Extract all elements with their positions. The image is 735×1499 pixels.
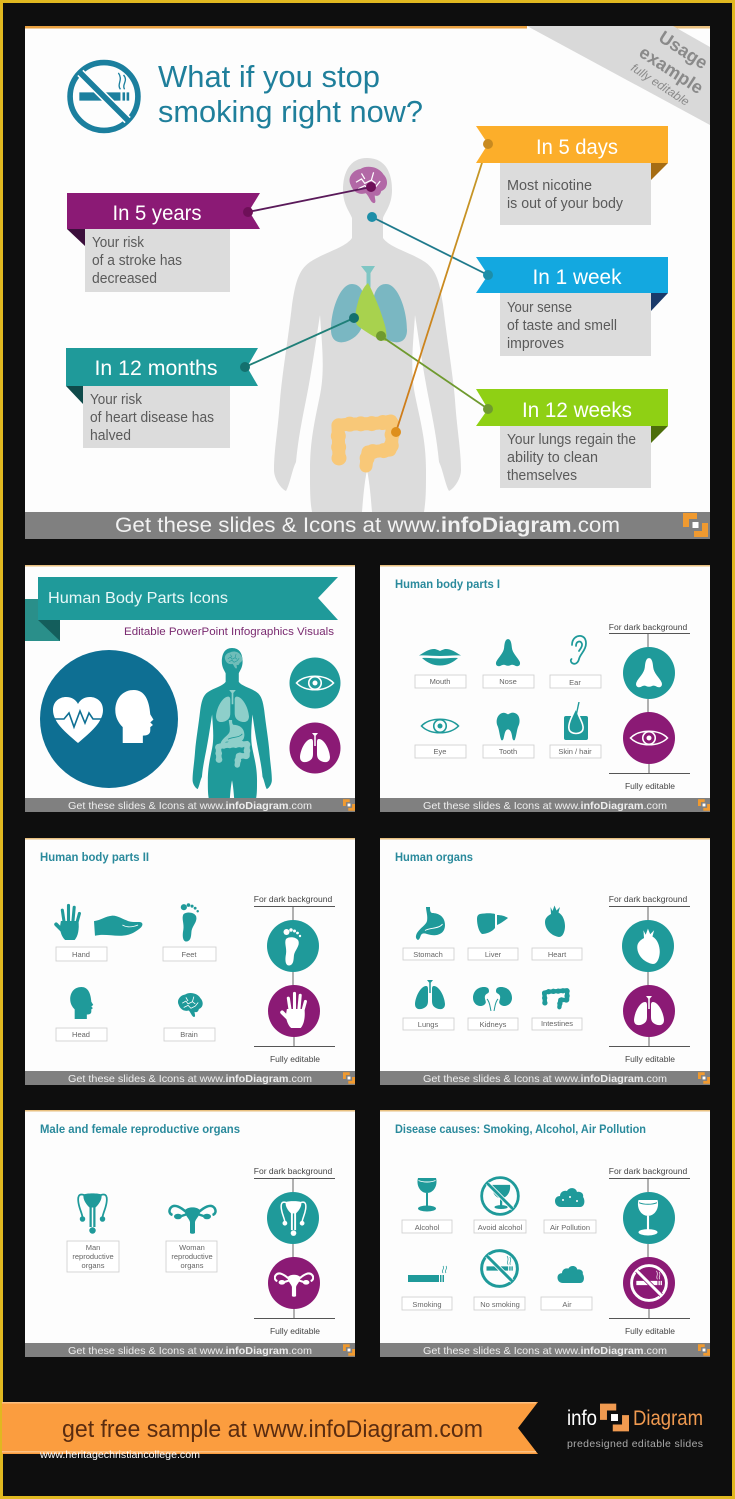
callout: in 1 week: of taste and smell [507,318,617,334]
icon group: avoid alcohol [474,1178,526,1233]
callout: in 12 months: Your risk [90,392,143,408]
body silhouette with organs [274,158,461,512]
callout: in 5 years [67,193,260,292]
icon group: alcohol [402,1178,452,1233]
corner tape: usage example [527,26,711,125]
icon group: male organs: organs [82,1261,105,1270]
title ribbon: Human Body Parts Icons [48,590,228,607]
icon row: mouth [415,649,466,688]
footer bar: Get these slides & Icons at www. infoDiagram.com [68,1073,312,1085]
icon row: skin and hair: Skin / hair [558,747,592,756]
callout: in 5 years: Your risk [92,235,145,251]
icon group: brain [164,993,215,1041]
icon group: intestines: Intestines [541,1019,573,1028]
callout: in 5 days: Most nicotine [507,178,592,194]
icon group: avoid alcohol: Avoid alcohol [478,1223,523,1232]
icon group: female organs [166,1206,217,1272]
icon row: tooth [483,713,534,758]
dark background column: Fully editable [270,1326,320,1336]
icon group: alcohol: Alcohol [415,1223,440,1232]
icon group: hand [56,905,142,961]
heading: Human body parts I [395,579,500,591]
callout: in 12 months: In 12 months [94,357,218,380]
panel: human body parts II [25,838,355,1085]
circle: eye [290,658,340,708]
footer bar: Get these slides & Icons at www. infoDiagram .com [115,514,620,537]
dark background column [609,1166,690,1336]
callout: in 12 months [66,348,258,448]
icon: pulse [53,711,103,727]
dark background column: For dark background [254,894,332,904]
callout: in 12 weeks: themselves [507,468,577,484]
icon group: intestines [532,990,582,1030]
icon: heart [53,697,103,743]
icon group: air [541,1266,592,1310]
panel: main smoking slide [25,26,711,539]
subtitle: Editable PowerPoint Infographics Visuals [124,626,335,638]
icon row: skin and hair [550,702,601,758]
icon group: air pollution: Air Pollution [550,1223,590,1232]
callout: in 12 weeks: In 12 weeks [522,399,632,422]
dark background column [609,894,690,1064]
footer bar: Get these slides & Icons at www. infoDiagram.com [423,1073,667,1085]
bottom ribbon: free sample: get free sample at www.infoDiagram.com [62,1416,483,1443]
callout: in 5 years: decreased [92,271,157,287]
icon group: smoking [402,1266,452,1310]
corner tape: usage example: fully editable [628,61,692,109]
icon group: lungs: Lungs [418,1020,438,1029]
dark background column [609,622,690,791]
heading: Disease causes: Smoking, Alcohol, Air Pollution [395,1124,646,1136]
icon group: heart: Heart [548,950,567,959]
icon row: eye: Eye [434,747,446,756]
corner tape: usage example: Usage [655,27,711,73]
icon group: male organs: reproductive [72,1252,114,1261]
callout: in 12 weeks: Your lungs regain the [507,432,636,448]
panel: human body parts icons [25,565,355,812]
footer bar: Get these slides & Icons at www. infoDiagram.com [423,1345,667,1357]
organ: brain [350,167,387,203]
dark background column: Fully editable [270,1054,320,1064]
icon row: eye [415,719,466,758]
footer bar [380,1071,710,1085]
callout: in 1 week: improves [507,336,564,352]
footer bar [25,798,355,812]
icon group: liver: Liver [485,950,502,959]
icon group: stomach: Stomach [413,950,443,959]
title: smoking right now? [158,94,423,129]
icon group: head [56,987,107,1041]
dark background column: For dark background [609,622,687,632]
footer bar: Get these slides & Icons at www. infoDiagram.com [423,800,667,812]
panel: human organs [380,838,710,1085]
dark background column: For dark background [609,1166,687,1176]
icon group: air pollution [544,1188,596,1233]
panel: disease causes [380,1110,710,1357]
organ: lungs [331,284,407,342]
big circle with heart and head [40,650,178,788]
footer bar: Get these slides & Icons at www. infoDiagram.com [68,800,312,812]
dark background column [254,1166,335,1336]
callout: in 12 months: of heart disease has [90,410,214,426]
icon group: female organs: Woman [179,1243,205,1252]
organ: liver and heart [355,283,387,341]
footer bar: Get these slides & Icons at www. infoDiagram.com [68,1345,312,1357]
icon row: tooth: Tooth [499,747,517,756]
icon group: kidneys: Kidneys [480,1020,507,1029]
dark background column: For dark background [609,894,687,904]
icon group: brain: Brain [180,1030,198,1039]
connector lines [245,144,488,432]
icon group: kidneys [468,987,518,1030]
callout: in 5 days: is out of your body [507,196,624,212]
heading: Human organs [395,852,473,864]
organ: intestines [338,421,392,466]
brand logo [567,1404,703,1450]
icon row: ear: Ear [569,678,581,687]
title: What if you stop [158,59,380,94]
icon group: stomach [403,907,454,960]
brand logo: Diagram [633,1407,703,1430]
icon row: mouth: Mouth [430,677,450,686]
callout: in 1 week [476,257,668,356]
callout: in 1 week: In 1 week [532,266,622,289]
icon group: no smoking: No smoking [480,1300,520,1309]
icon group: male organs: Man [86,1243,100,1252]
icon row: nose: Nose [499,677,517,686]
icon: no smoking [70,63,138,130]
icon: head [115,690,153,743]
footer bar [25,512,710,539]
icon row: nose [483,639,534,688]
title [158,59,423,129]
icon group: hand: Hand [72,950,90,959]
callout: in 5 days: In 5 days [536,136,618,159]
icon group: female organs: reproductive [171,1252,213,1261]
callout: in 5 days [476,126,668,225]
icon group: heart [532,906,582,960]
footer bar [25,1071,355,1085]
bottom ribbon: free sample [2,1402,538,1454]
icon group: air: Air [562,1300,572,1309]
dark background column: For dark background [254,1166,332,1176]
icon group: foot [163,903,216,961]
callout: in 12 weeks [476,389,668,488]
icon group: foot: Feet [181,950,197,959]
organ: trachea [361,266,375,292]
dark background column [254,894,335,1064]
heading: Human body parts II [40,852,149,864]
icon group: lungs [403,980,454,1030]
circle: lungs [290,722,340,774]
icon row: ear [550,636,601,688]
icon group: smoking: Smoking [412,1300,442,1309]
callout: in 5 years: In 5 years [112,202,202,225]
callout: in 12 weeks: ability to clean [507,450,598,466]
dark background column: Fully editable [625,1054,675,1064]
callout: in 5 years: of a stroke has [92,253,182,269]
body figure [193,648,272,798]
corner tape: usage example: example [636,42,707,98]
callout: in 1 week: Your sense [507,300,572,316]
connector dots [349,182,401,437]
icon group: male organs [67,1193,119,1272]
icon group: head: Head [72,1030,90,1039]
heading: Male and female reproductive organs [40,1124,240,1136]
dark background column: Fully editable [625,1326,675,1336]
footer bar [380,1343,710,1357]
brand logo: predesigned editable slides [567,1438,703,1450]
panel: human body parts I [380,565,710,812]
watermark url: www.heritagechristiancollege.com [39,1450,200,1461]
callout: in 12 months: halved [90,428,131,444]
title ribbon [25,577,338,641]
panel: reproductive organs [25,1110,355,1357]
brand logo: info [567,1407,597,1430]
icon group: female organs: organs [181,1261,204,1270]
icon group: no smoking [474,1251,525,1310]
footer bar [25,1343,355,1357]
dark background column: Fully editable [625,781,675,791]
footer bar [380,798,710,812]
icon group: liver [468,913,518,960]
